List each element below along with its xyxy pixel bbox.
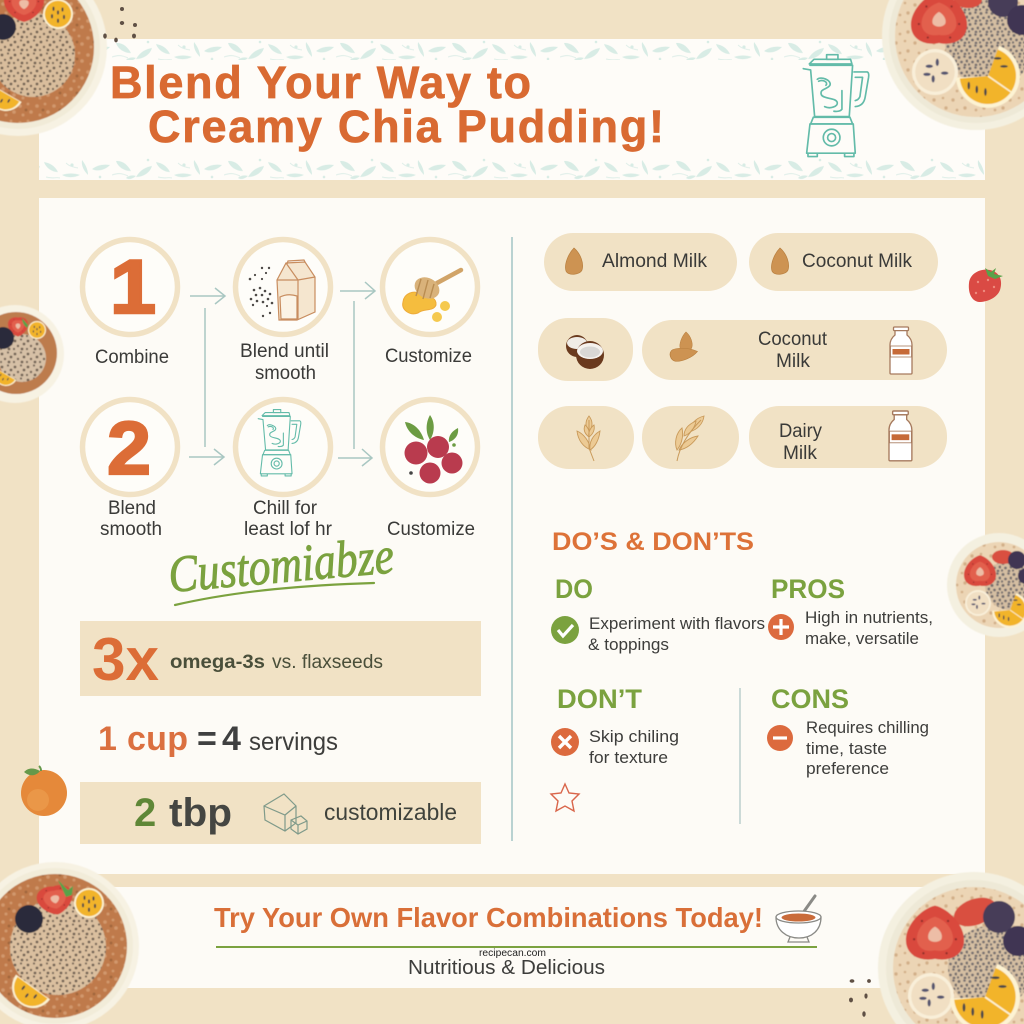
pill: almond milk: Almond Milk xyxy=(602,251,707,272)
block: cons: Requires chilling xyxy=(806,719,929,737)
footer subtitle: Nutritious & Delicious xyxy=(408,957,605,979)
panel: footer xyxy=(39,887,985,988)
step labels: Blend until xyxy=(240,341,329,362)
block: pros xyxy=(768,574,933,648)
step labels: Combine xyxy=(95,347,169,368)
pill: coconut milk with almond and bottle: Coconut xyxy=(758,329,828,350)
step labels: least lof hr xyxy=(244,519,333,540)
block: cons: CONS xyxy=(771,684,849,714)
stat: 2 tbp customizable: 2 xyxy=(134,791,156,835)
pill: coconut milk: Coconut Milk xyxy=(802,251,912,272)
icon: strawberry xyxy=(969,268,1003,302)
bowl: mid left xyxy=(0,305,64,403)
block: pros: PROS xyxy=(771,574,845,604)
heading: do's and don'ts: DO’S & DON’TS xyxy=(552,528,754,556)
stat: 1 cup = 4 servings: = xyxy=(197,720,217,758)
block: don't: Skip chiling xyxy=(589,728,679,746)
block: do: Experiment with flavors xyxy=(589,615,765,633)
stat: 3x omega-3s: 3x xyxy=(92,626,159,693)
step circle: seeds and milk carton xyxy=(236,240,330,334)
icon: blender header xyxy=(803,55,869,157)
block: cons: preference xyxy=(806,760,889,778)
pill: coconut milk xyxy=(749,233,938,291)
pill: wheat icon one xyxy=(538,406,634,469)
stat: 1 cup = 4 servings: 4 xyxy=(222,720,241,758)
panel: main content xyxy=(39,198,985,874)
icon: bowl with spoon xyxy=(776,896,821,942)
divider: do and cons xyxy=(739,688,741,824)
bowl: top right xyxy=(882,0,1024,130)
icon: orange fruit xyxy=(21,766,67,816)
title: Blend Your Way to xyxy=(110,57,531,108)
step circle: 1: 1 xyxy=(110,245,156,330)
watermark: recipecan.com xyxy=(479,948,546,959)
script heading: Customiabze: Customiabze xyxy=(166,527,396,604)
step circle: 2 xyxy=(82,400,178,494)
title xyxy=(110,57,664,152)
block: pros: make, versatile xyxy=(805,630,919,648)
block: do: DO xyxy=(555,574,593,604)
stat: 2 tbp customizable: customizable xyxy=(324,799,457,825)
step labels: Chill for xyxy=(253,498,318,519)
seeds: bottom right xyxy=(849,979,871,1017)
stat: 3x omega-3s: vs. flaxseeds xyxy=(272,652,383,673)
block: cons xyxy=(767,684,929,778)
stat: 2 tbp customizable: tbp xyxy=(169,791,232,835)
arrows: flow between steps xyxy=(189,282,375,466)
step circle: 1 xyxy=(82,240,178,334)
block: don't xyxy=(551,684,679,767)
stat: 3x omega-3s: omega-3s xyxy=(170,652,265,673)
panel: header xyxy=(39,39,985,180)
step labels xyxy=(95,341,475,540)
stat: 1 cup = 4 servings: servings xyxy=(249,728,338,756)
step circle: honey dipper xyxy=(382,240,478,334)
step labels: Customize xyxy=(387,519,475,540)
title: Creamy Chia Pudding! xyxy=(148,101,664,152)
step labels: Customize xyxy=(385,346,472,367)
step circle: 2: 2 xyxy=(107,406,151,490)
icon: star xyxy=(551,784,579,811)
pill: almond milk xyxy=(544,233,737,291)
bowl: mid right xyxy=(947,533,1024,637)
block: cons: time, taste xyxy=(806,740,887,758)
pill: dairy milk xyxy=(749,406,947,468)
bowl: bottom left xyxy=(0,862,139,1024)
divider: center column xyxy=(511,237,513,841)
pill: dairy milk: Dairy xyxy=(779,421,822,442)
stat: 1 cup = 4 servings: 1 cup xyxy=(98,720,188,758)
step labels: smooth xyxy=(255,363,316,384)
footer heading: Try Your Own Flavor Combinations Today! xyxy=(214,902,763,933)
step labels: smooth xyxy=(100,519,162,540)
step circle: berries xyxy=(382,400,478,494)
pill: wheat icon two xyxy=(642,406,739,469)
block: don't: for texture xyxy=(589,749,668,767)
stat: 1 cup = 4 servings xyxy=(98,720,338,758)
pill: dairy milk: Milk xyxy=(783,443,817,464)
stat: 2 tbp customizable xyxy=(80,782,481,844)
bowl: top left xyxy=(0,0,107,136)
bowl: bottom right xyxy=(878,872,1024,1024)
pill: coconut icon xyxy=(538,318,633,381)
seeds: top left xyxy=(103,7,137,42)
block: do xyxy=(551,574,765,654)
step circle: blender xyxy=(236,400,330,494)
block: don't: DON’T xyxy=(557,684,643,714)
footer divider xyxy=(216,946,817,948)
block: pros: High in nutrients, xyxy=(805,609,933,627)
pill: coconut milk with almond and bottle: Milk xyxy=(776,351,810,372)
block: do: & toppings xyxy=(588,636,669,654)
pill: coconut milk with almond and bottle xyxy=(642,320,947,380)
stat: 3x omega-3s xyxy=(80,621,481,696)
step labels: Blend xyxy=(108,498,156,519)
